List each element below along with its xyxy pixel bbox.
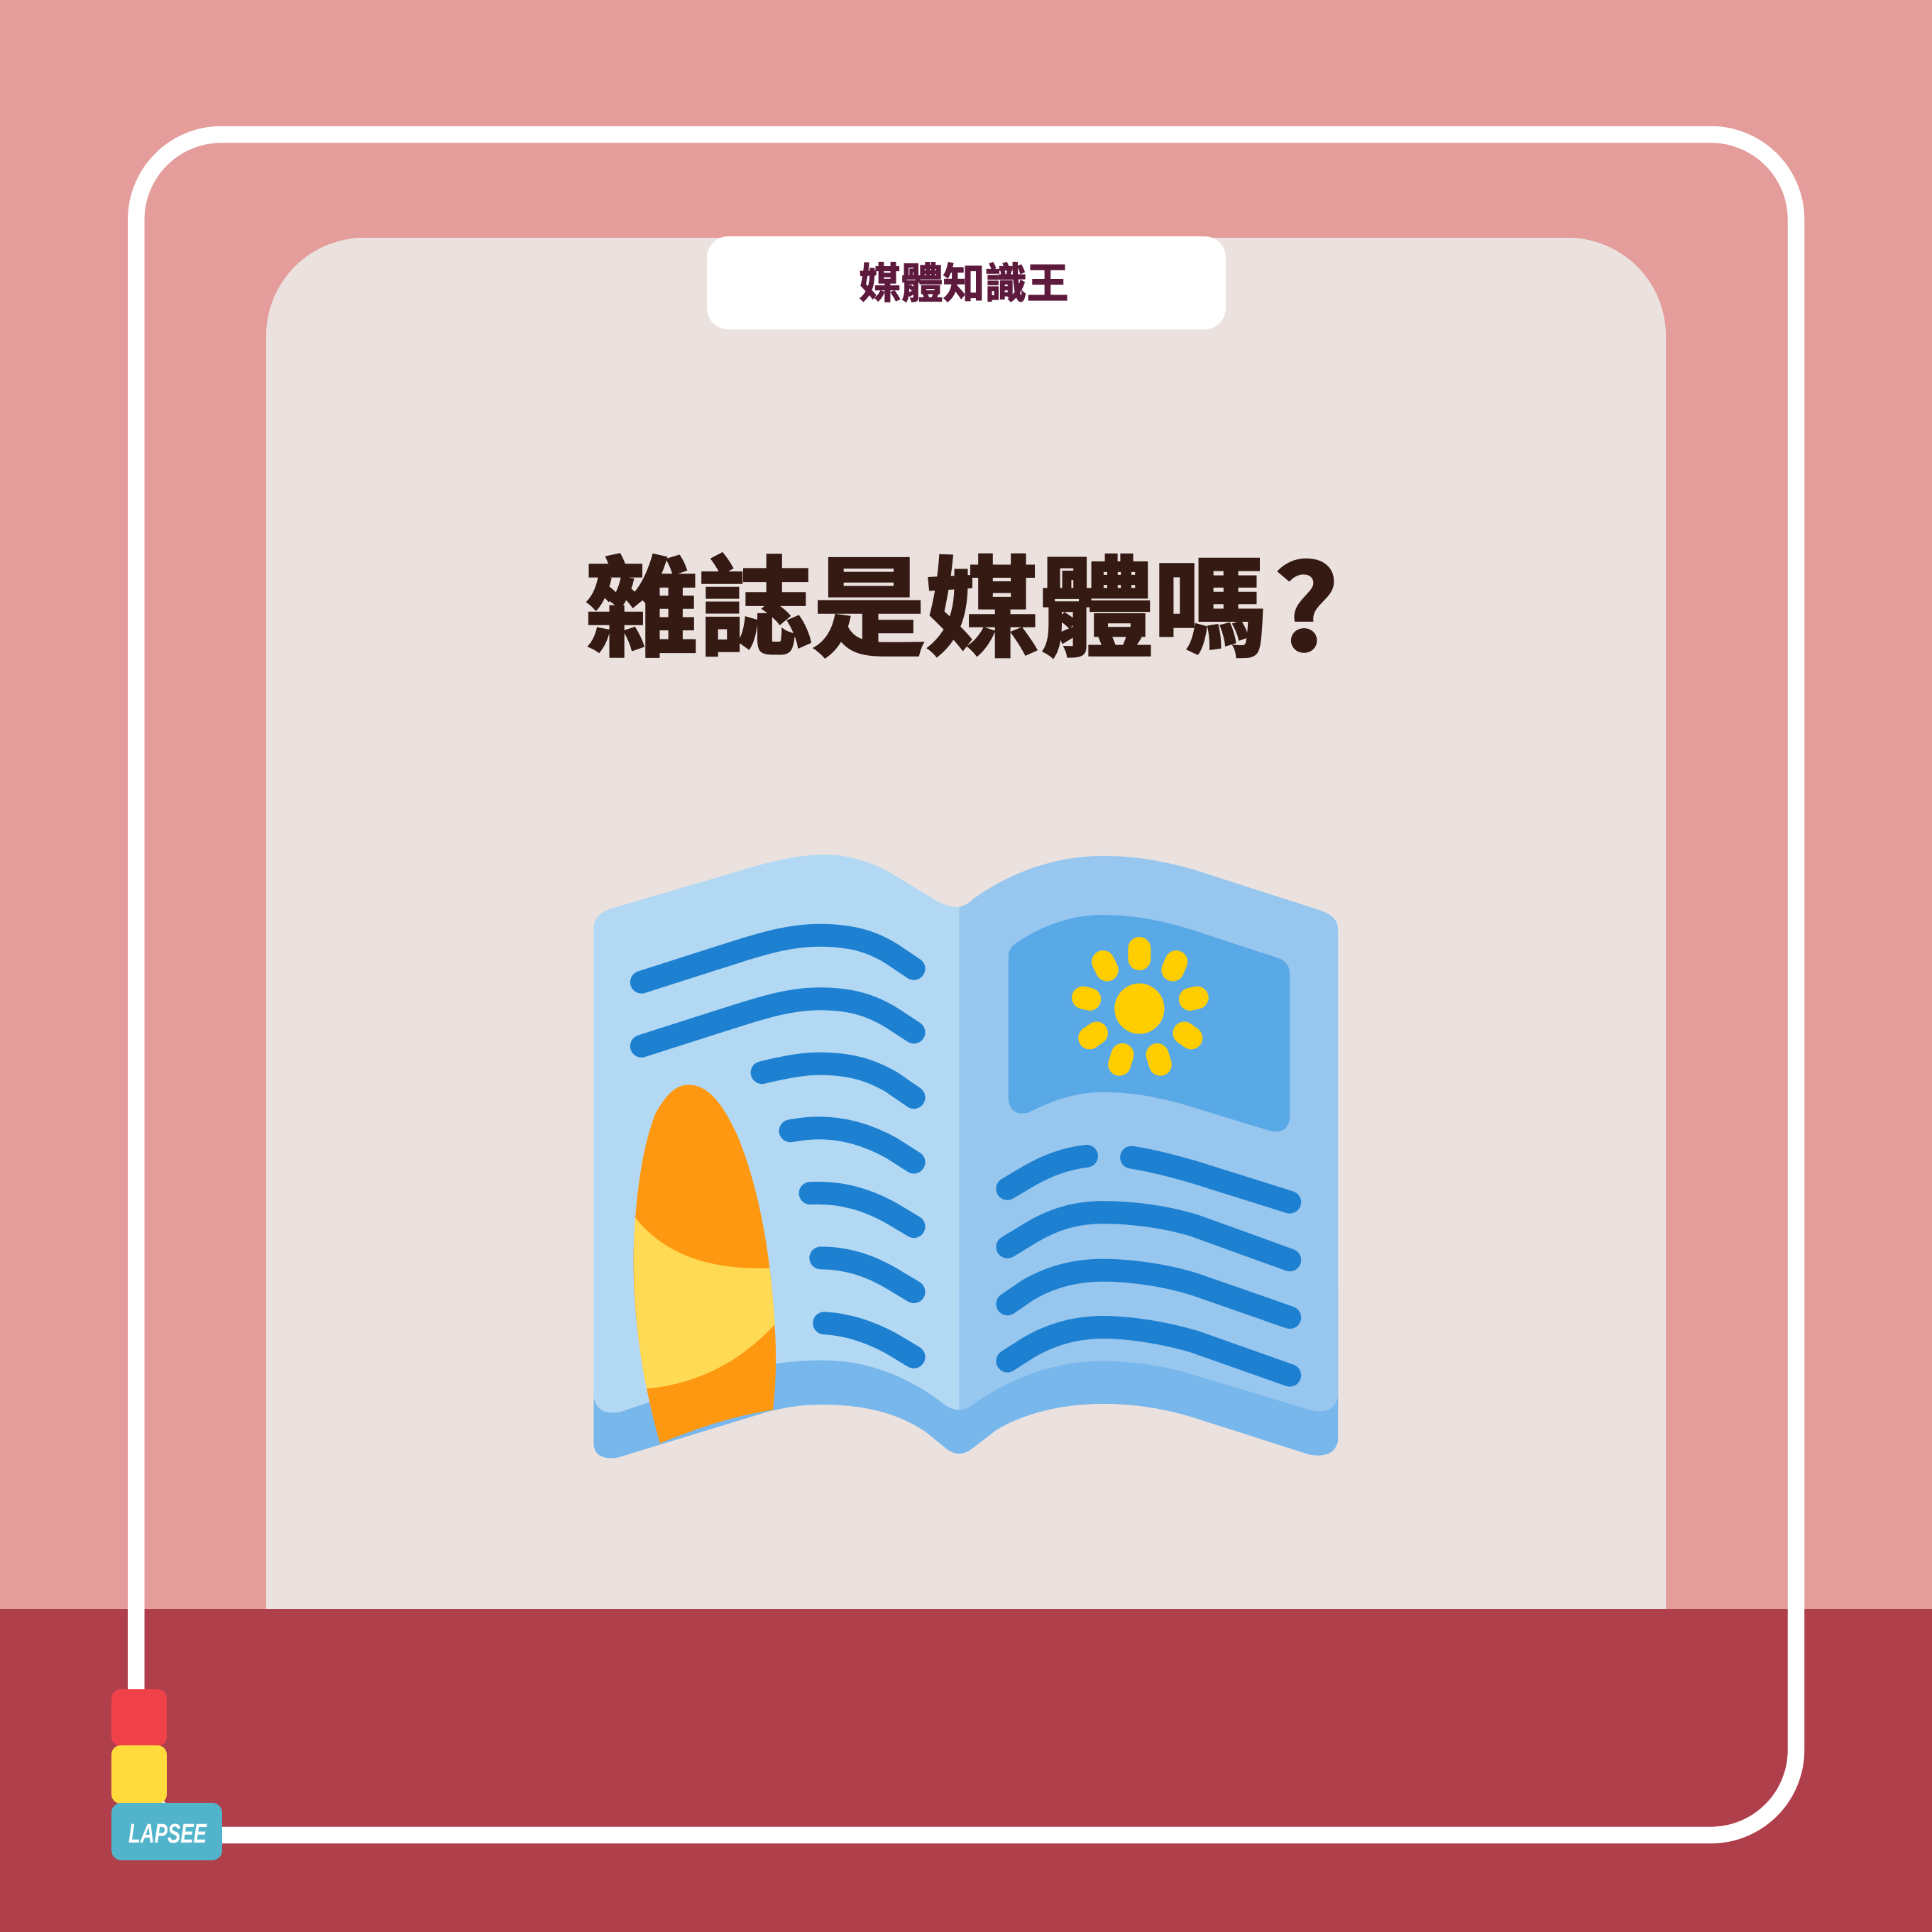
- picture block with sun: [1009, 915, 1290, 1131]
- surfboard picture: [634, 1085, 776, 1444]
- tag: category label pill: 媒體知識王: [859, 250, 1069, 310]
- logo: LAPSEE colour blocks: [111, 1689, 222, 1860]
- title: ?: [1273, 515, 1339, 684]
- right page text lines: [1007, 1156, 1290, 1376]
- left page text lines: [642, 935, 914, 1357]
- title: 雜誌是媒體嗎: [585, 522, 1267, 679]
- logo: LAPSEE colour blocks: LAPSEE: [128, 1819, 207, 1849]
- magazine cover underside: [593, 1285, 1338, 1458]
- background: dark red bottom band: [0, 1609, 1932, 1932]
- left page: [593, 855, 959, 1412]
- panel: light central card: [266, 238, 1666, 1609]
- tag: category label pill: [707, 236, 1226, 329]
- white rounded frame: [136, 135, 1796, 1835]
- icon: open magazine: [593, 855, 1338, 1458]
- right page: [959, 856, 1338, 1411]
- icon: sun: [1083, 948, 1197, 1065]
